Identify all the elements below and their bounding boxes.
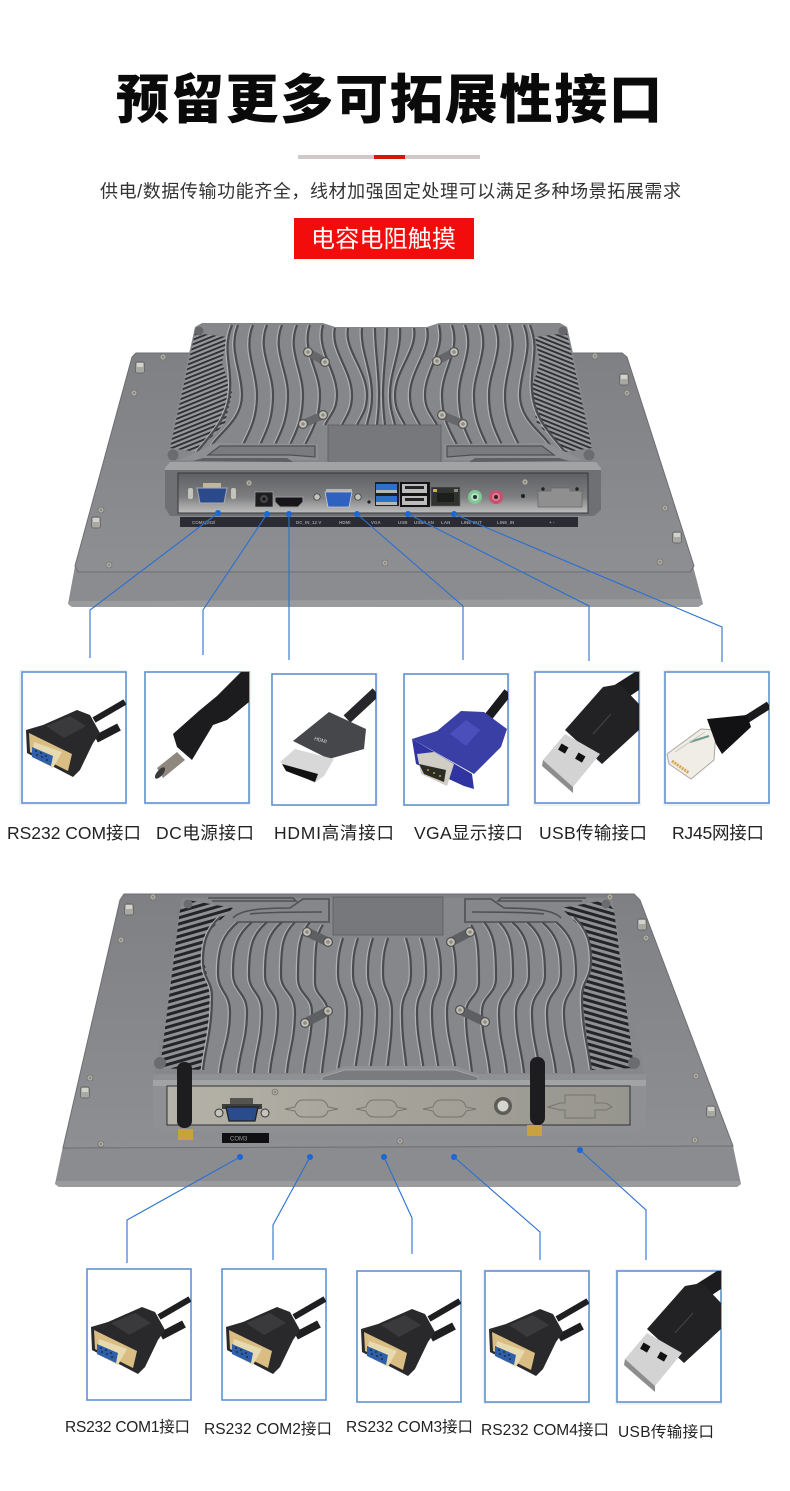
card: COM4 cable [483, 1269, 590, 1404]
label: HDMI: HDMI高清接口 [274, 823, 394, 843]
card: VGA cable [403, 673, 510, 806]
callout: COM1 leader [127, 1154, 243, 1263]
callout: COM2 leader [273, 1154, 313, 1260]
ghost port: COM2 [285, 1100, 338, 1117]
title: 预留更多可拓展性接口 [116, 71, 662, 130]
card: RS232 COM cable [19, 670, 127, 805]
top ridges [208, 898, 586, 922]
front band [55, 1146, 741, 1187]
title divider [298, 155, 480, 159]
plate hardware [80, 894, 716, 1147]
subtitle: 供电/数据传输功能齐全，线材加强固定处理可以满足多种场景拓展需求 [100, 182, 681, 202]
card: COM1 cable [87, 1269, 191, 1400]
port labels strip: COM1(232/ [192, 520, 216, 525]
panel: device rear view 2 [55, 894, 741, 1187]
port labels strip: HDMI [339, 520, 350, 525]
callout: DC leader [203, 511, 270, 655]
ghost port: COM3 [356, 1100, 407, 1117]
card: USB cable 2 [615, 1269, 722, 1405]
callout: COM3 leader [381, 1154, 412, 1254]
port: line out [468, 490, 482, 504]
port labels strip: LINE_IN [497, 520, 514, 525]
port labels strip: USB/LAN [414, 520, 434, 525]
callout: VGA leader [354, 511, 463, 660]
card: HDMI cable: HDMI [313, 736, 327, 745]
port: DC jack [255, 492, 273, 507]
IO box [165, 462, 601, 516]
port labels strip [180, 517, 578, 527]
callout: USB leader 2 [577, 1147, 646, 1260]
heatsink [165, 323, 598, 463]
label: USB 2: USB传输接口 [618, 1423, 714, 1441]
port: LAN [431, 487, 460, 506]
port: COM DB9 [215, 1098, 269, 1121]
red tag: touch types: 电容电阻触摸 [311, 226, 456, 253]
label: DC: DC电源接口 [156, 823, 254, 843]
callout: COM4 leader [451, 1154, 540, 1260]
COM label plate [222, 1133, 269, 1143]
label: COM3: RS232 COM3接口 [346, 1418, 473, 1436]
port labels strip: LAN [441, 520, 450, 525]
red tag: touch types [294, 218, 474, 259]
callout: RS232 leader [90, 510, 221, 658]
plate hardware [92, 353, 682, 568]
port: VGA [314, 489, 371, 507]
power button [494, 1097, 512, 1115]
card: DC power plug [144, 671, 251, 805]
callout: USB leader [405, 511, 589, 661]
port labels strip: + - [549, 520, 555, 525]
card: USB cable [533, 670, 641, 806]
label: USB: USB传输接口 [539, 823, 647, 843]
card: HDMI cable [271, 673, 378, 806]
callout: RJ45 leader [451, 511, 722, 662]
card: RJ45 cable [663, 670, 770, 806]
heatsink [153, 897, 646, 1082]
label recess [333, 897, 443, 935]
card: COM2 cable [222, 1269, 326, 1400]
card: COM3 cable [357, 1271, 461, 1402]
port labels strip: VGA [371, 520, 382, 525]
label: RJ45: RJ45网接口 [672, 823, 764, 843]
antenna left [177, 1062, 193, 1140]
label: VGA: VGA显示接口 [414, 823, 523, 843]
port labels strip: DC_IN_12 V [296, 520, 321, 525]
callout: HDMI leader [286, 511, 292, 660]
label: COM2: RS232 COM2接口 [204, 1420, 332, 1438]
USB knockout [548, 1095, 612, 1118]
back plate [75, 353, 694, 572]
port: DB9 [188, 483, 236, 503]
port: USB 3.0 stack [375, 482, 399, 506]
port: USB 2.0 stack [400, 482, 430, 507]
mounting bracket bolts [298, 347, 468, 429]
IO box [153, 1066, 646, 1131]
back plate [63, 894, 733, 1148]
port labels strip: LINE OUT [461, 520, 482, 525]
front band [68, 566, 703, 607]
COM label plate: COM3 [230, 1136, 248, 1142]
knockout [538, 487, 582, 507]
port: HDMI [275, 497, 303, 507]
antenna right [527, 1057, 545, 1136]
label: RS232 COM: RS232 COM接口 [7, 823, 141, 843]
label: COM4: RS232 COM4接口 [481, 1421, 609, 1439]
port: line in [489, 490, 503, 504]
panel: device rear view 1 [68, 323, 703, 607]
label: COM1: RS232 COM1接口 [65, 1418, 190, 1436]
port labels strip: USB [398, 520, 408, 525]
mounting bracket bolts [300, 927, 490, 1028]
label recess [328, 425, 441, 463]
ghost port: COM4 [423, 1100, 476, 1117]
